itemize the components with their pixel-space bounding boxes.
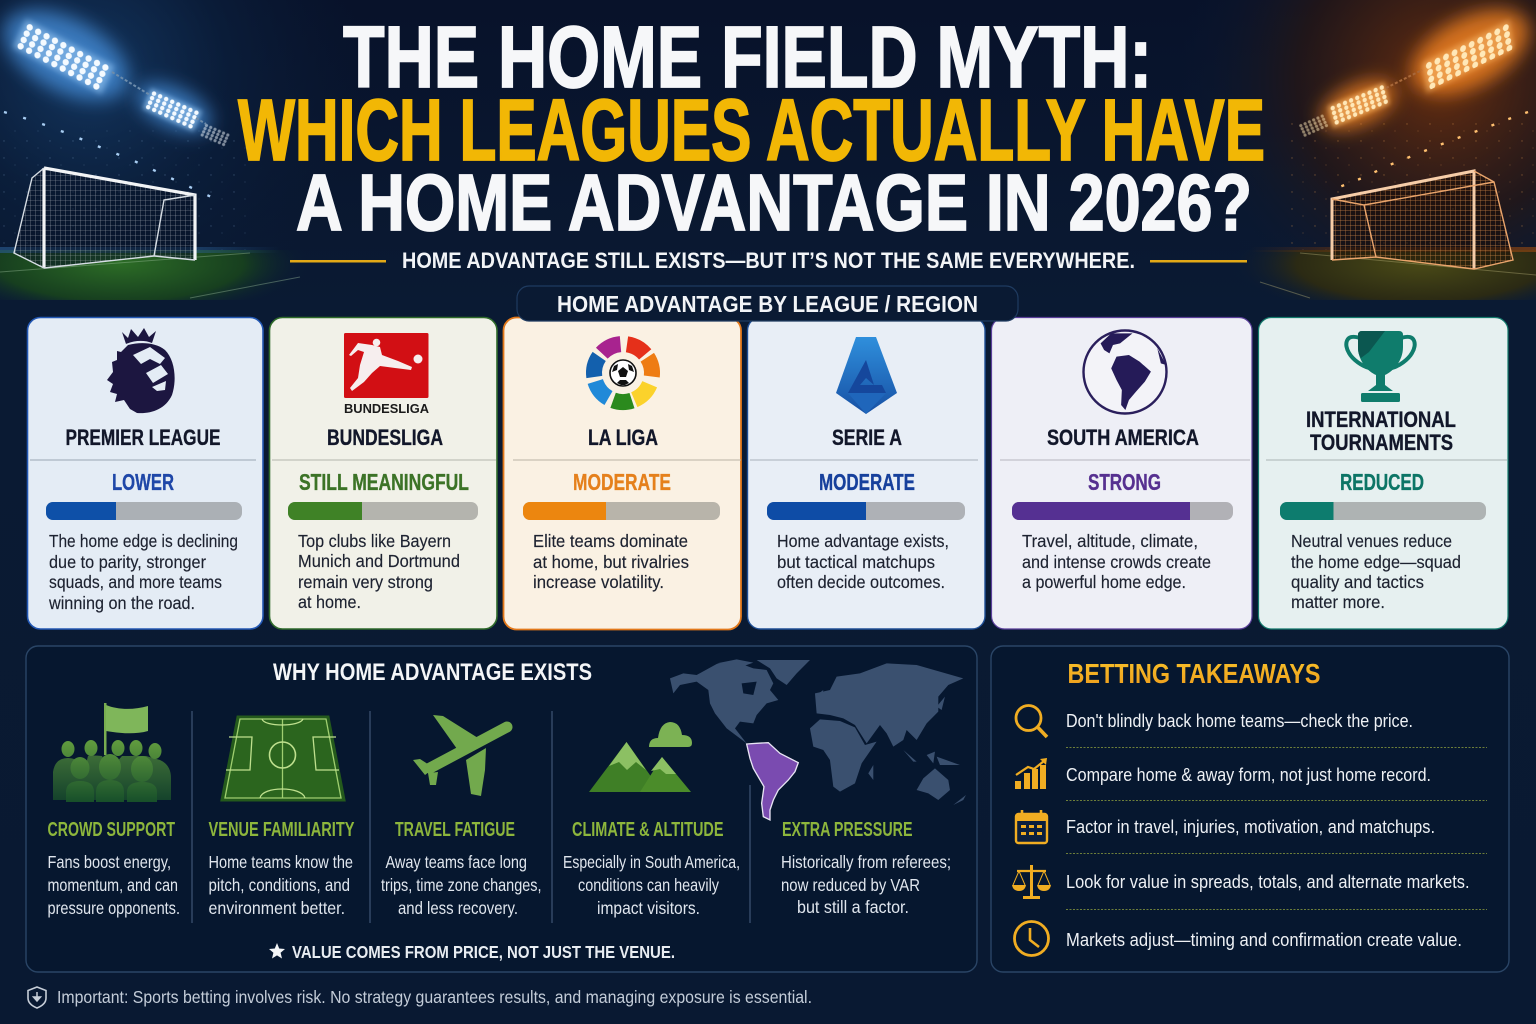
rating label: STILL MEANINGFUL	[299, 469, 469, 495]
description: squads, and more teams	[49, 572, 222, 592]
description: due to parity, stronger	[49, 552, 206, 572]
column: venue familiarity: VENUE FAMILIARITY	[208, 818, 355, 841]
icon: right goal	[1332, 171, 1513, 269]
description: remain very strong	[298, 572, 433, 592]
rating label: MODERATE	[573, 469, 671, 495]
description: at home, but rivalries	[533, 552, 689, 572]
description	[1291, 531, 1461, 612]
description: and intense crowds create	[1022, 552, 1211, 572]
disclaimer: Important: Sports betting involves risk. No strategy guarantees results, and managing exposure is essential.	[57, 987, 812, 1007]
section tab heading: HOME ADVANTAGE BY LEAGUE / REGION	[557, 291, 978, 317]
hero: right stadium scene	[1176, 0, 1536, 300]
takeaway 4	[1012, 865, 1470, 899]
column: extra pressure: EXTRA PRESSURE	[782, 818, 912, 841]
league name: BUNDESLIGA	[327, 425, 443, 450]
section tab heading	[517, 286, 1018, 321]
description	[1022, 531, 1211, 592]
league name: LA LIGA	[588, 425, 658, 450]
icon: trophy	[1346, 331, 1415, 402]
description: at home.	[298, 592, 361, 612]
column: crowd support: CROWD SUPPORT	[48, 818, 175, 841]
description	[48, 531, 238, 613]
description: winning on the road.	[48, 593, 195, 613]
league name: SERIE A	[832, 425, 902, 450]
icon: rising bar chart	[1015, 758, 1047, 789]
column: travel fatigue: trips, time zone changes,	[381, 875, 542, 895]
league name: TOURNAMENTS	[1310, 430, 1453, 455]
title line 3: A HOME ADVANTAGE IN 2026?	[296, 158, 1252, 247]
description: increase volatility.	[533, 572, 664, 592]
rating bar	[1012, 502, 1233, 520]
column: extra pressure: now reduced by VAR	[781, 875, 920, 895]
column: crowd support: momentum, and can	[48, 875, 178, 895]
icon: globe	[1084, 330, 1166, 414]
column: venue familiarity: environment better.	[208, 898, 345, 918]
league name: SOUTH AMERICA	[1047, 425, 1199, 450]
description: the home edge—squad	[1291, 552, 1461, 572]
description: Neutral venues reduce	[1291, 531, 1452, 551]
rating bar	[1280, 502, 1486, 520]
world map	[670, 659, 966, 820]
icon: pitch	[222, 717, 344, 800]
takeaway 2: Compare home & away form, not just home record.	[1066, 764, 1431, 785]
panel: Bundesliga card	[270, 318, 497, 629]
takeaway 3: Factor in travel, injuries, motivation, and matchups.	[1066, 816, 1435, 837]
description: matter more.	[1291, 592, 1385, 612]
rating label: MODERATE	[819, 469, 915, 495]
panel: South America card	[992, 318, 1252, 629]
rating label: LOWER	[112, 469, 174, 495]
league name: INTERNATIONAL	[1306, 407, 1456, 432]
icon: La Liga logo	[594, 344, 652, 402]
column: climate and altitude: CLIMATE & ALTITUDE	[572, 818, 724, 841]
column: travel fatigue: Away teams face long	[386, 852, 527, 872]
takeaway 1: Don't blindly back home teams—check the price.	[1066, 710, 1413, 731]
title	[238, 9, 1265, 247]
takeaway 4: Look for value in spreads, totals, and alternate markets.	[1066, 871, 1470, 892]
description	[533, 531, 689, 592]
icon: shield	[28, 987, 46, 1008]
icon: scales	[1012, 865, 1051, 899]
icon: magnifier	[1016, 706, 1047, 737]
rating bar	[767, 502, 965, 520]
panel heading: BETTING TAKEAWAYS	[1068, 658, 1320, 689]
column: extra pressure: Historically from referees;	[781, 852, 951, 872]
icon: Bundesliga logo	[344, 333, 429, 416]
icon: clock	[1014, 922, 1048, 956]
rating bar	[46, 502, 242, 520]
takeaway 2	[1015, 758, 1431, 789]
description	[298, 531, 460, 612]
icon: left floodlights	[0, 0, 231, 147]
description: Munich and Dortmund	[298, 551, 460, 571]
icon: right floodlights	[1298, 0, 1536, 140]
panel: why home advantage exists	[26, 646, 977, 972]
subtitle: HOME ADVANTAGE STILL EXISTS—BUT IT’S NOT THE SAME EVERYWHERE.	[402, 248, 1135, 273]
icon: Bundesliga logo: BUNDESLIGA	[344, 402, 429, 416]
title line 1: THE HOME FIELD MYTH:	[343, 9, 1152, 106]
description: Travel, altitude, climate,	[1022, 531, 1198, 551]
column: extra pressure: but still a factor.	[797, 897, 909, 917]
description: Top clubs like Bayern	[298, 531, 451, 551]
takeaway 3	[1016, 810, 1435, 843]
column: venue familiarity: Home teams know the	[208, 852, 353, 872]
description: often decide outcomes.	[777, 572, 945, 592]
description: but tactical matchups	[777, 552, 935, 572]
column: crowd support	[48, 703, 180, 918]
description: The home edge is declining	[49, 531, 238, 551]
league name	[1306, 407, 1456, 455]
takeaway 5: Markets adjust—timing and confirmation create value.	[1066, 929, 1462, 950]
description: Elite teams dominate	[533, 531, 688, 551]
panel: Premier League card	[28, 318, 263, 629]
column: travel fatigue: TRAVEL FATIGUE	[395, 818, 515, 841]
column: climate and altitude: conditions can heavily	[578, 875, 719, 895]
description	[777, 531, 949, 592]
panel: International Tournaments card	[1258, 318, 1508, 629]
column: climate and altitude: impact visitors.	[597, 898, 700, 918]
rating label: STRONG	[1088, 469, 1161, 495]
column: crowd support: Fans boost energy,	[48, 852, 171, 872]
takeaway 1	[1016, 706, 1413, 737]
icon: crowd with flag	[53, 703, 171, 802]
panel: La Liga card	[504, 318, 741, 630]
takeaway 5	[1014, 922, 1462, 956]
column: travel fatigue	[381, 715, 542, 918]
icon: mountains and cloud	[589, 722, 692, 792]
column: climate and altitude: Especially in South America,	[563, 852, 740, 872]
description: a powerful home edge.	[1022, 572, 1186, 592]
rating bar	[523, 502, 720, 520]
icon: plane	[413, 715, 507, 796]
column: venue familiarity	[208, 717, 355, 918]
hero: left stadium scene	[0, 0, 400, 300]
panel: Serie A card	[748, 318, 985, 629]
callout: value note: VALUE COMES FROM PRICE, NOT JUST THE VENUE.	[292, 942, 675, 962]
highlighted South America	[747, 743, 798, 820]
column: venue familiarity: pitch, conditions, and	[208, 875, 350, 895]
icon: lion logo	[107, 328, 175, 413]
description: quality and tactics	[1291, 572, 1424, 592]
league name: PREMIER LEAGUE	[66, 425, 220, 450]
column: extra pressure	[781, 818, 951, 917]
column: climate and altitude	[563, 722, 740, 918]
panel heading: WHY HOME ADVANTAGE EXISTS	[273, 659, 592, 686]
rating label: REDUCED	[1340, 469, 1424, 495]
column: crowd support: pressure opponents.	[48, 898, 180, 918]
icon: calendar	[1016, 810, 1047, 843]
panel: betting takeaways	[991, 646, 1509, 972]
column: travel fatigue: and less recovery.	[398, 898, 518, 918]
icon: Serie A logo	[836, 337, 897, 414]
description: Home advantage exists,	[777, 531, 949, 551]
rating bar	[288, 502, 478, 520]
icon: left goal	[14, 168, 195, 268]
